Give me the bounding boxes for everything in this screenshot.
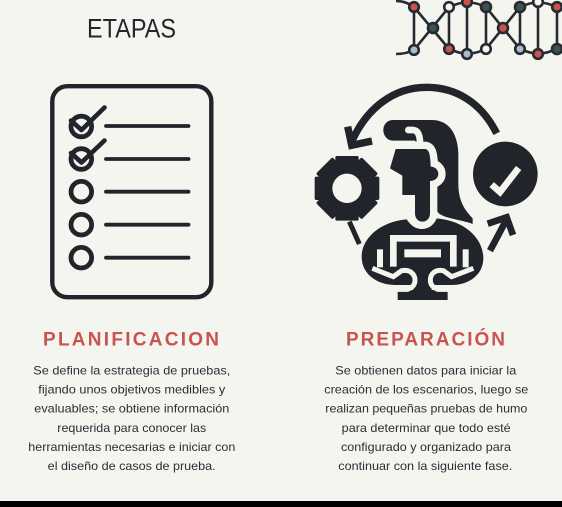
icon: person with gear and check cycle — [315, 87, 538, 300]
text block: planificacion: requerida para conocer las — [57, 421, 206, 435]
text block: preparacion: Se obtienen datos para iniciar la — [335, 364, 517, 378]
person: torso — [362, 218, 483, 300]
text block: preparacion: configurado y organizado para — [341, 440, 511, 454]
text block: preparacion: para determinar que todo esté — [342, 421, 511, 435]
icon: DNA strand — [396, 0, 562, 59]
text block: planificacion: herramientas necesarias e iniciar con — [28, 440, 235, 454]
icon: check circle — [473, 142, 538, 206]
text block: planificacion: fijando unos objetivos medibles y — [38, 382, 225, 396]
text block: preparacion — [324, 364, 529, 473]
text block: planificacion — [28, 364, 235, 473]
text block: preparacion: realizan pequeñas pruebas de humo — [325, 402, 528, 416]
heading: preparacion: PREPARACIÓN — [346, 328, 505, 350]
heading: planificacion: PLANIFICACION — [43, 330, 219, 350]
text block: planificacion: Se define la estrategia de pruebas, — [33, 364, 230, 378]
text block: planificacion: evaluables; se obtiene información — [34, 402, 229, 416]
person: hair — [383, 120, 473, 224]
person: face — [390, 149, 438, 222]
title: ETAPAS — [87, 13, 176, 43]
text block: planificacion: el diseño de casos de prueba. — [48, 459, 216, 473]
arrow: top arc to gear — [348, 87, 497, 145]
icon: gear — [315, 156, 379, 244]
arrow: gear to check — [488, 217, 513, 251]
person: hook gap — [408, 130, 420, 143]
text block: preparacion: continuar con la siguiente fase. — [338, 459, 512, 473]
icon: checklist — [52, 86, 211, 297]
text block: preparacion: creación de los escenarios, luego se — [324, 382, 529, 396]
bottom black bar — [0, 501, 562, 507]
